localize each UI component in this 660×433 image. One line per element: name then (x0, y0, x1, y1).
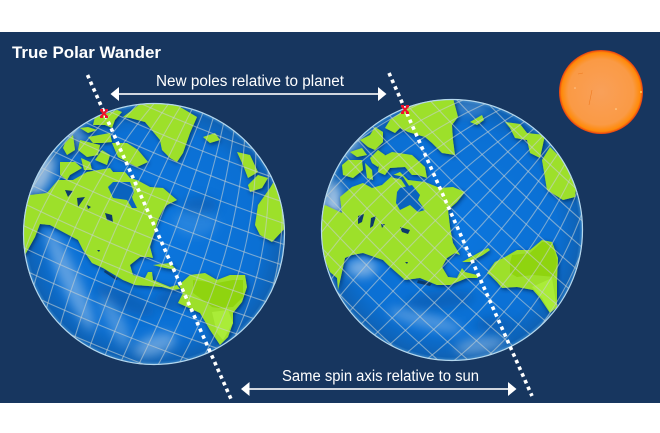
left globe clouds (25, 126, 217, 362)
label: same spin axis: Same spin axis relative to sun (282, 368, 479, 385)
right globe rim (322, 100, 582, 360)
Iceland (203, 133, 220, 143)
right globe dark ocean patches (404, 288, 515, 333)
North America (15, 168, 180, 290)
Greenland (385, 97, 458, 155)
British Isles (237, 152, 258, 178)
left South America interior shading (193, 280, 243, 308)
left lakes (65, 190, 118, 280)
Greenland (123, 101, 197, 162)
Arctic islands (93, 110, 122, 128)
Europe (248, 175, 268, 192)
left globe (23, 103, 285, 365)
North America (316, 172, 478, 290)
right spin axis dotted line (389, 73, 532, 396)
Africa (255, 178, 290, 242)
arrow: new poles (110, 87, 386, 101)
right globe graticule (322, 100, 583, 360)
Africa (542, 147, 577, 200)
left spin axis dotted line (88, 75, 231, 399)
South America (487, 240, 558, 313)
right lakes (358, 214, 432, 286)
British Isles and Europe (505, 122, 545, 158)
label: new poles: New poles relative to planet (156, 73, 345, 90)
left globe rim (24, 104, 284, 364)
right globe land (316, 97, 577, 313)
South America (178, 273, 247, 345)
right pole marker (401, 106, 409, 113)
right South America interior shading (510, 242, 557, 277)
right globe (321, 99, 583, 361)
right globe clouds (324, 102, 506, 357)
title: True Polar Wander (12, 44, 162, 62)
left Hudson Bay (108, 182, 137, 208)
right Hudson Bay (392, 176, 425, 212)
left globe graticule (23, 104, 284, 365)
left pole marker (100, 110, 108, 117)
left globe land (15, 101, 290, 345)
sun (559, 50, 643, 134)
left globe dark ocean patches (92, 197, 218, 323)
Iceland (470, 115, 484, 125)
Arctic islands (360, 127, 383, 150)
arrow: same spin axis (241, 382, 516, 396)
